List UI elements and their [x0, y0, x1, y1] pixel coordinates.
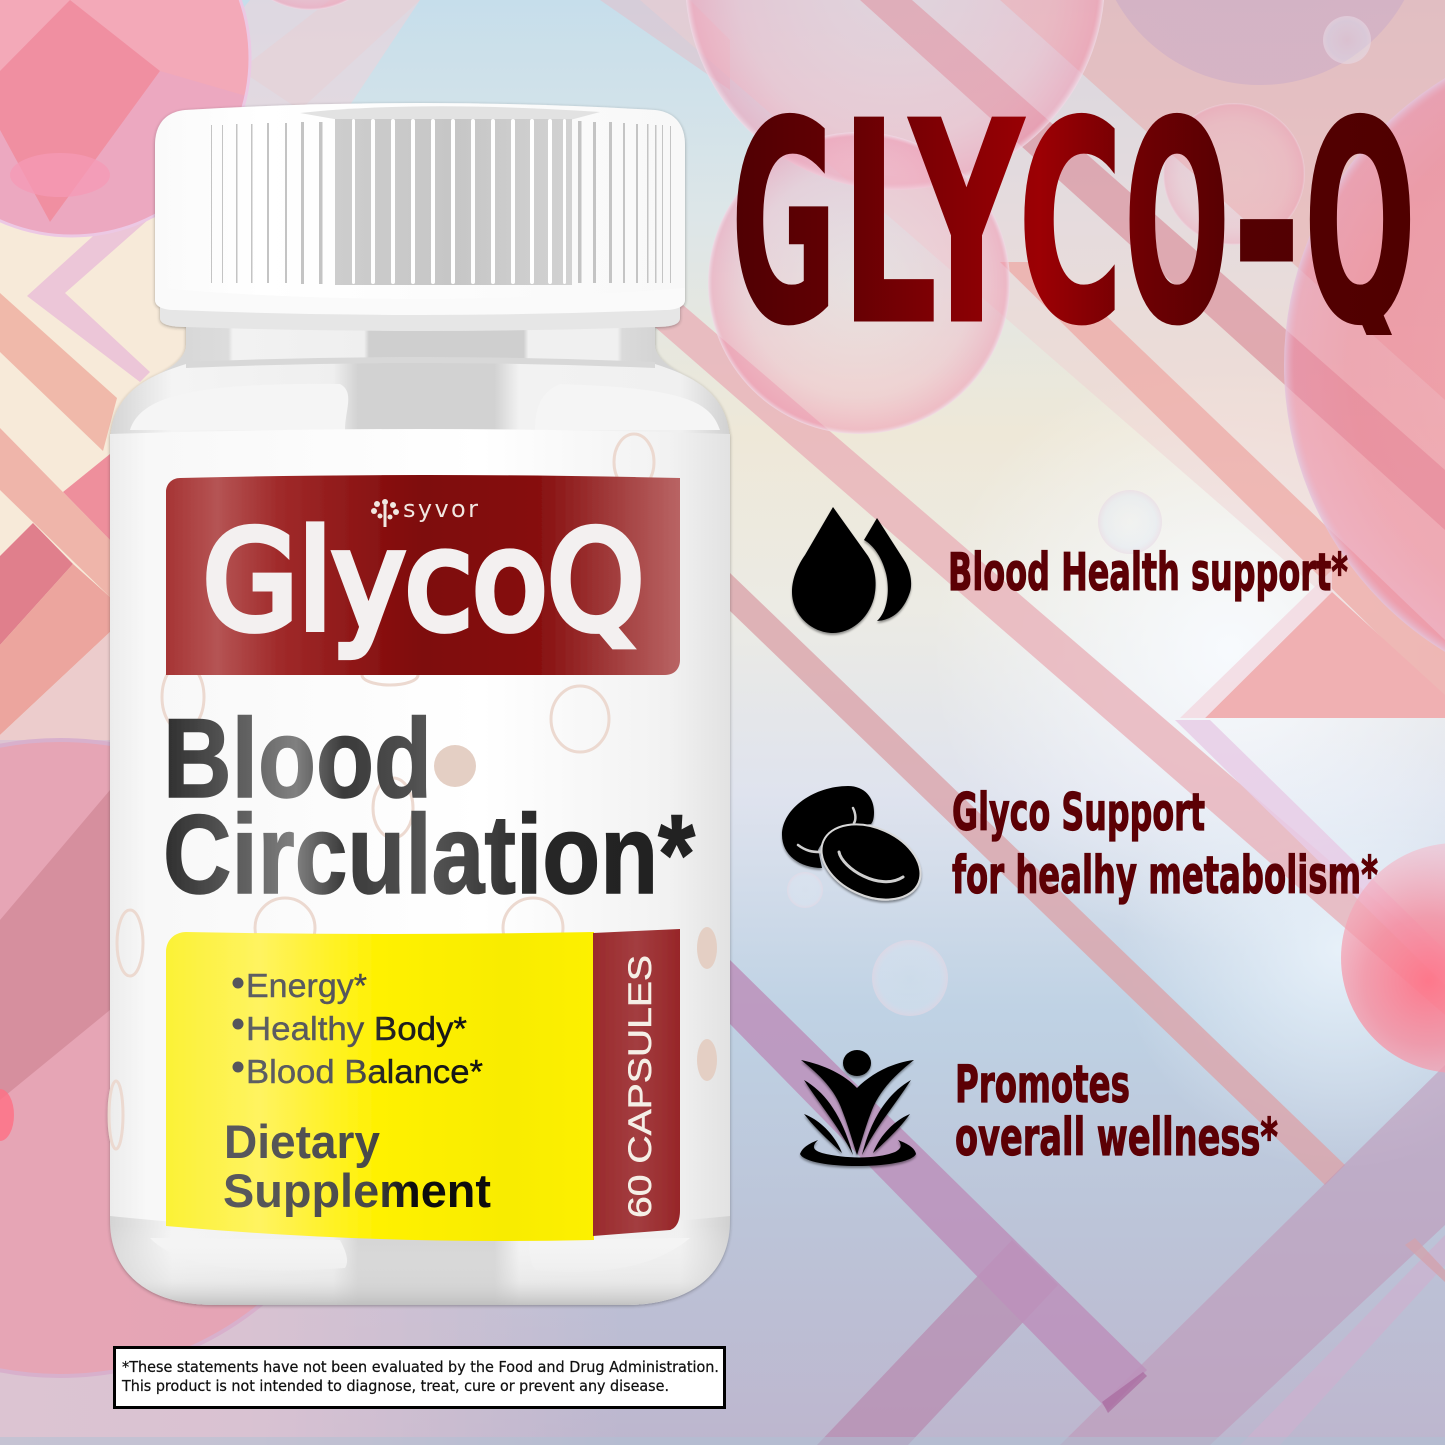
title: O	[1124, 64, 1230, 386]
bottle cap	[155, 103, 685, 310]
title: L	[841, 64, 937, 386]
title: Y	[908, 64, 1025, 386]
disclaimer box: This product is not intended to diagnose, treat, cure or prevent any disease.	[121, 1377, 669, 1395]
brand name: GlycoQ	[203, 503, 644, 660]
lower-left field	[0, 740, 620, 1445]
capsule count side panel: 60 CAPSULES	[622, 955, 658, 1218]
icon: tree logo	[371, 499, 399, 527]
icon: figure with leaves	[800, 1050, 916, 1166]
top middle faint bands	[240, 0, 420, 110]
cap ring	[160, 306, 680, 331]
title: -	[1232, 64, 1301, 386]
feature: glyco support	[782, 783, 1378, 914]
bottle neck	[150, 320, 690, 378]
upper right bands	[640, 0, 1445, 700]
bottle label	[110, 429, 730, 1232]
feature: glyco support: Glyco Support	[952, 783, 1205, 843]
dietary supplement	[223, 1115, 491, 1217]
yellow panel	[166, 932, 594, 1241]
benefit list: Energy*	[246, 967, 367, 1004]
left cream field	[0, 180, 300, 740]
benefit list: Blood Balance*	[246, 1053, 483, 1090]
product bottle	[109, 103, 730, 1305]
title: G	[731, 64, 837, 386]
capsule count side panel	[593, 929, 680, 1236]
headline: Blood	[163, 696, 432, 821]
disclaimer box: *These statements have not been evaluated by the Food and Drug Administration.	[122, 1358, 719, 1376]
bottle body	[110, 360, 730, 1305]
dietary supplement: Dietary	[224, 1115, 380, 1168]
maroon brand panel	[166, 475, 680, 675]
brand logo	[371, 495, 478, 527]
left chevron	[27, 178, 157, 382]
lower bottle highlights	[150, 1238, 690, 1272]
feature: wellness: overall wellness*	[955, 1108, 1278, 1168]
dietary supplement: Supplement	[223, 1164, 491, 1217]
feature: wellness: Promotes	[955, 1055, 1130, 1115]
icon: blood cells	[782, 786, 932, 914]
lower right bands	[1060, 1065, 1445, 1445]
label decorative circles	[109, 434, 654, 1149]
icon: blood drops	[792, 507, 876, 633]
brand logo: syvor	[403, 495, 478, 523]
feature: blood health	[792, 507, 1348, 633]
title: C	[1018, 64, 1123, 386]
top left bubble	[0, 0, 260, 240]
benefit list: Healthy Body*	[246, 1010, 467, 1047]
title	[736, 112, 1410, 335]
disclaimer box	[114, 1348, 724, 1408]
cap ribs	[211, 121, 671, 284]
product bottle: Circulation*	[163, 792, 695, 917]
benefit list	[232, 967, 483, 1090]
feature: wellness	[800, 1050, 1278, 1168]
